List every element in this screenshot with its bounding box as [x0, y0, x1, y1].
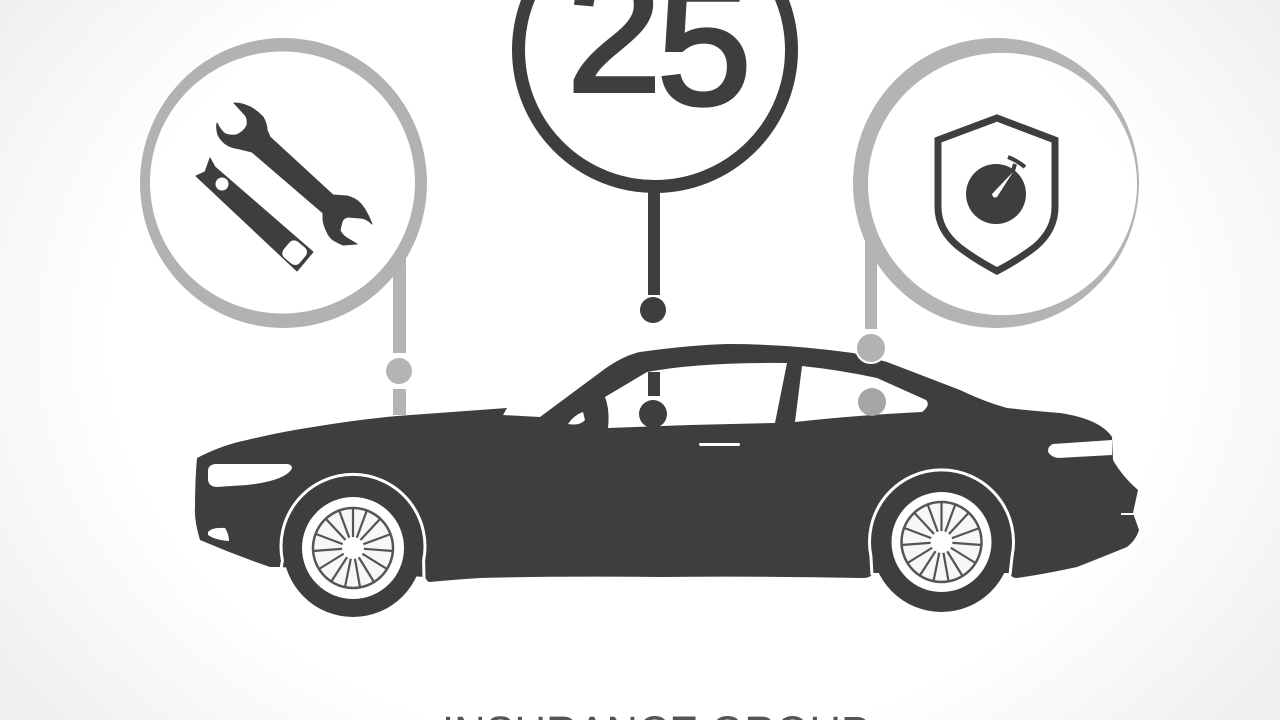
front wheel arch gap: [281, 474, 425, 578]
rear side window: [795, 366, 928, 422]
right pin dot upper: [856, 333, 886, 363]
icon: stopwatch gauge: [966, 157, 1026, 224]
car body: [195, 344, 1139, 582]
left ring: [140, 38, 427, 328]
right pin stem: [865, 237, 877, 329]
door handle: [699, 443, 740, 446]
spanner square hole: [280, 238, 309, 267]
headlight: [208, 464, 292, 487]
left pin stem and dot: [386, 258, 412, 415]
rear wheel: [872, 472, 1012, 612]
small quarter window: [568, 412, 585, 424]
fog light: [208, 528, 229, 541]
front side window: [605, 363, 787, 428]
rear wheel arch gap: [870, 470, 1014, 575]
circle: insurance number 25: [518, 0, 792, 428]
circle: wrench and spanner: [140, 38, 427, 415]
spanner round hole: [216, 178, 228, 190]
exhaust mark: [1121, 513, 1135, 515]
center ring: [518, 0, 792, 186]
right ring: [853, 38, 1139, 328]
front wheel: [283, 477, 423, 617]
right pin dot lower: [858, 388, 886, 416]
icon: shield: [938, 118, 1055, 271]
icon: spanner: [196, 158, 313, 271]
car silhouette with windows, lights and wheels: [195, 344, 1139, 617]
tail light: [1048, 440, 1112, 458]
center pin stem and dot: [639, 188, 667, 428]
icon: wrench: [217, 103, 372, 245]
circle: shield with speedometer: [853, 38, 1139, 416]
